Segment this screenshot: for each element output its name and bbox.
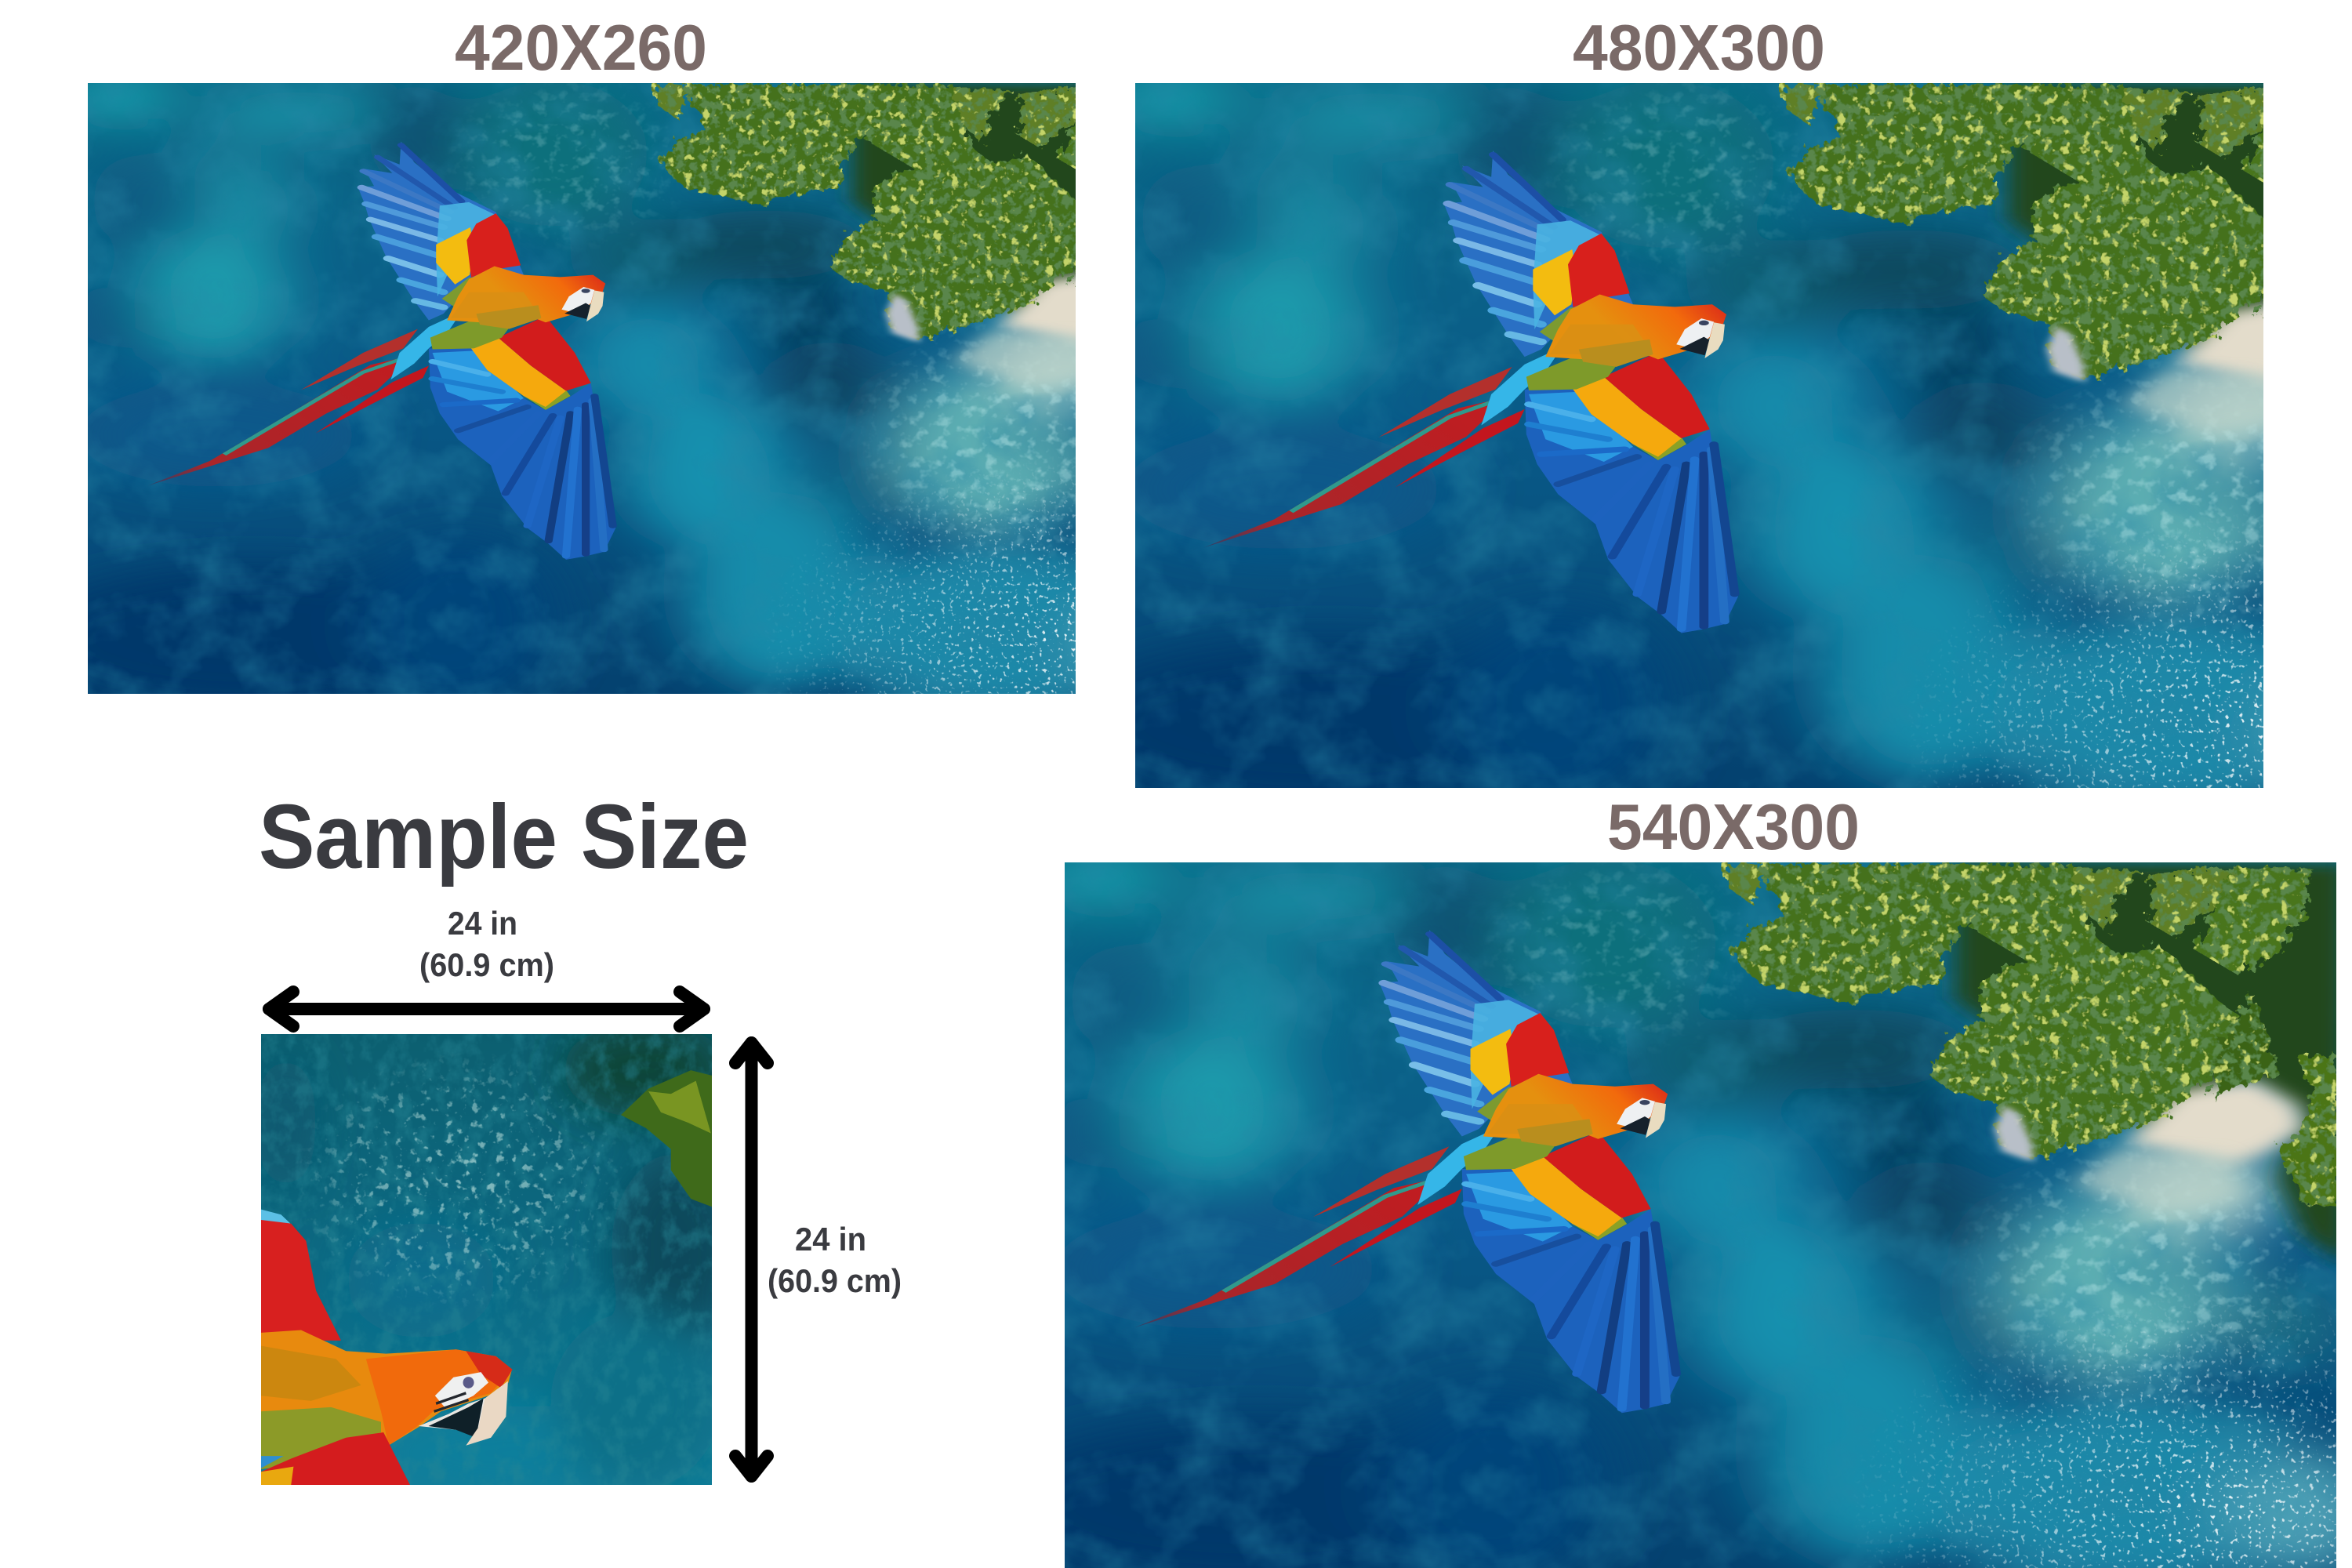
heading: 540X300: 540X300 <box>1607 790 1860 863</box>
width label: 24 in (60.9 cm): 24 in <box>448 905 517 942</box>
panel: 480x300 photo of a macaw over the ocean <box>1058 55 2352 814</box>
height label: 24 in (60.9 cm) <box>768 1221 902 1299</box>
arrow: vertical double-headed height <box>735 1043 768 1476</box>
heading: 420X260: 420X260 <box>455 11 707 84</box>
height label: 24 in (60.9 cm): (60.9 cm) <box>768 1262 902 1299</box>
height label: 24 in (60.9 cm): 24 in <box>795 1221 866 1258</box>
panel: 540x300 photo of a macaw over the ocean <box>985 834 2352 1568</box>
width label: 24 in (60.9 cm): (60.9 cm) <box>419 946 554 983</box>
heading: Sample Size: Sample Size <box>259 786 749 887</box>
arrow: horizontal double-headed width <box>269 992 704 1026</box>
panel: sample crop of the macaw head <box>261 1034 712 1485</box>
panel: 420x260 photo of a macaw over the ocean <box>20 59 1290 717</box>
heading: 480X300: 480X300 <box>1573 11 1825 84</box>
width label: 24 in (60.9 cm) <box>419 905 554 983</box>
